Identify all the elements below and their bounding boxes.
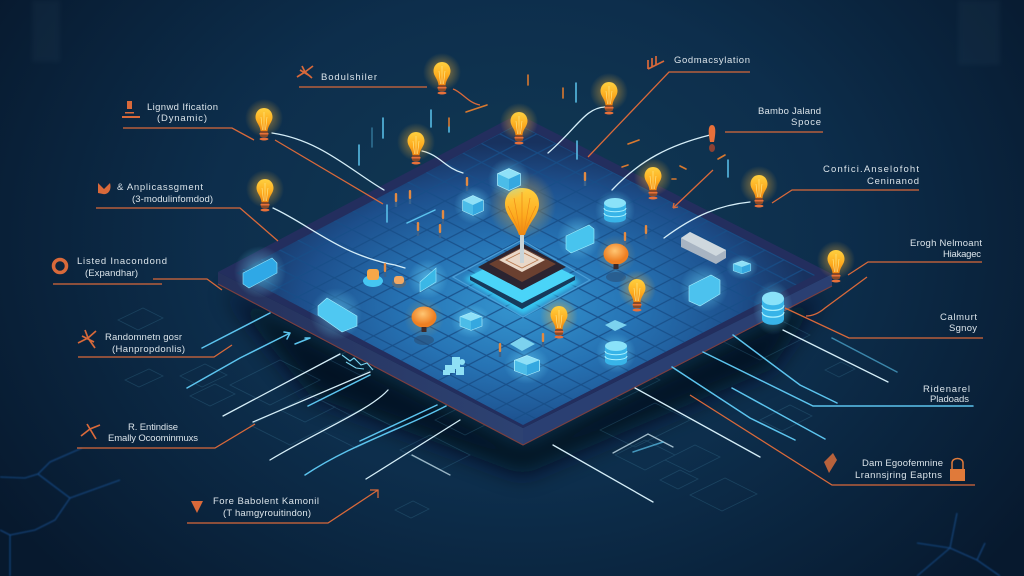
label: right 10 [772,164,919,203]
leader [96,208,278,241]
icon: figure [81,424,100,439]
connector lines below platform, left [187,313,460,479]
cube [454,186,492,224]
bulb [245,99,283,140]
chip glowing base [464,250,580,314]
small cube [726,255,758,279]
balloon [404,298,444,345]
label: right 9: Spoce [791,117,821,128]
faint corner network: top right [958,0,1000,65]
text: R. Entindise [128,422,178,433]
text: Bambo Jaland [758,106,821,117]
icon: spark [78,330,96,348]
orange dais [363,269,383,287]
label: right 9 [725,106,823,132]
slab left side [218,272,523,445]
cube [504,346,550,384]
leader [588,72,750,157]
text: Erogh Nelmoant [910,238,982,249]
icon: cluster [824,453,837,473]
bulb [817,241,855,282]
network lines: bottom left [0,448,120,576]
label: right 12 [785,277,983,338]
cube [451,304,491,338]
label: right 13 [923,384,970,405]
label: bottom left 7: (T hamgyrouitindon) [223,508,311,519]
text: Fore Babolent Kamonil [213,496,319,507]
balloon [596,235,636,282]
text: Godmacsylation [674,55,750,66]
surface grid [236,124,815,425]
label: right 10: Ceninanod [867,176,919,187]
cylinder [595,190,635,230]
label: left 5 [78,330,232,357]
bulb [590,73,628,114]
leader [690,395,975,485]
network lines: bottom right [917,513,1000,576]
grey box [681,232,726,264]
icon: spark [297,66,313,78]
box [557,216,601,260]
leader [187,490,378,523]
box [310,288,362,340]
icon: leaf [98,183,111,194]
label: left 2: (Dynamic) [157,113,207,124]
leader [123,128,254,140]
bulb [740,166,778,208]
edge stack [753,281,793,335]
leader [299,86,427,88]
bulb [423,53,461,94]
stem [520,235,524,263]
label: right 11: Hiakagec [943,249,981,260]
icon: badge [54,260,66,272]
label: left 3: (3-modulinfomdod) [132,194,213,205]
label: right 13: Pladoads [930,394,969,405]
label: left 4: (Expandhar) [85,268,138,279]
slab bottom edge [218,284,832,445]
faint circuit traces under platform [118,308,855,518]
label: left 2 [122,101,254,140]
leader [785,277,983,338]
label: bottom right 14 [690,395,975,485]
leader [78,345,232,357]
chip inner tier [489,247,556,282]
text: Dam Egoofemnine [862,458,943,469]
label: right 12: Sgnoy [949,323,977,334]
flat box [234,246,286,298]
label: left 4 [53,256,222,290]
text: Randomnetn gosr [105,332,182,343]
slab right side [523,274,832,445]
connector lines from top [272,75,750,268]
box [408,259,448,299]
faint corner network: top left [32,0,60,62]
text: Bodulshiler [321,72,377,83]
label: top right 8 [588,55,750,157]
bulb [500,103,538,144]
icon: bars [648,56,664,69]
orange lamp [392,276,406,288]
light bulbs [245,53,855,338]
bulb [246,170,284,212]
leader [53,279,222,290]
data cluster [443,357,465,375]
platform [218,114,832,445]
flat tile [510,337,535,351]
label: right 11 [848,238,982,275]
icon: stack [122,101,140,118]
bulb [634,158,672,200]
cylinder [596,333,636,373]
small markers [384,172,647,357]
label: left 6 [77,422,255,448]
leader [77,424,255,448]
label: left 6: Emally Ocoominmuxs [108,433,198,444]
shadow under platform [225,290,825,475]
connector lines below platform, right [553,330,973,502]
box [680,264,728,312]
bulb [618,270,656,312]
text: Lignwd Ification [147,102,218,113]
central chip [453,235,590,317]
label: top left 1 [297,66,427,87]
slab top surface [236,124,815,425]
text: Ridenarel [923,384,970,395]
cube [488,158,530,200]
leader [725,131,823,133]
leader [848,262,982,275]
orange balloons [404,235,636,345]
bulb [540,297,578,338]
flat tile [605,320,627,331]
central large bulb [488,171,556,239]
chip dark body [478,243,566,290]
text: Confici.Anselofoht [823,164,919,175]
label: left 3 [96,182,278,241]
label: left 5: (Hanpropdonlis) [112,344,185,355]
text: & Anplicassgment [117,182,203,193]
orange pin [709,125,715,152]
leader [772,190,919,203]
chip outer frame [453,240,590,317]
icon: pin [191,501,203,513]
label: bottom left 7 [187,490,378,523]
icon: lock [950,458,965,481]
chip white square [499,248,545,272]
bulb [397,123,435,164]
cubes and storage on platform [234,158,793,384]
label: bottom right 14: Lrannsjring Eaptns [855,470,942,481]
text: Listed Inacondond [77,256,167,267]
slab rim [218,114,832,428]
text: Calmurt [940,312,977,323]
